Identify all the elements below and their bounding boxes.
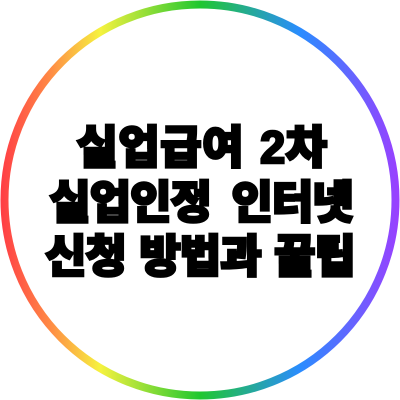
- title line 2: 실업인정 인터넷: [49, 177, 353, 228]
- title line 3: 신청 방법과 꿀팁: [45, 231, 355, 282]
- title line 1: 실업급여 2차: [76, 122, 328, 173]
- title: [44, 122, 355, 282]
